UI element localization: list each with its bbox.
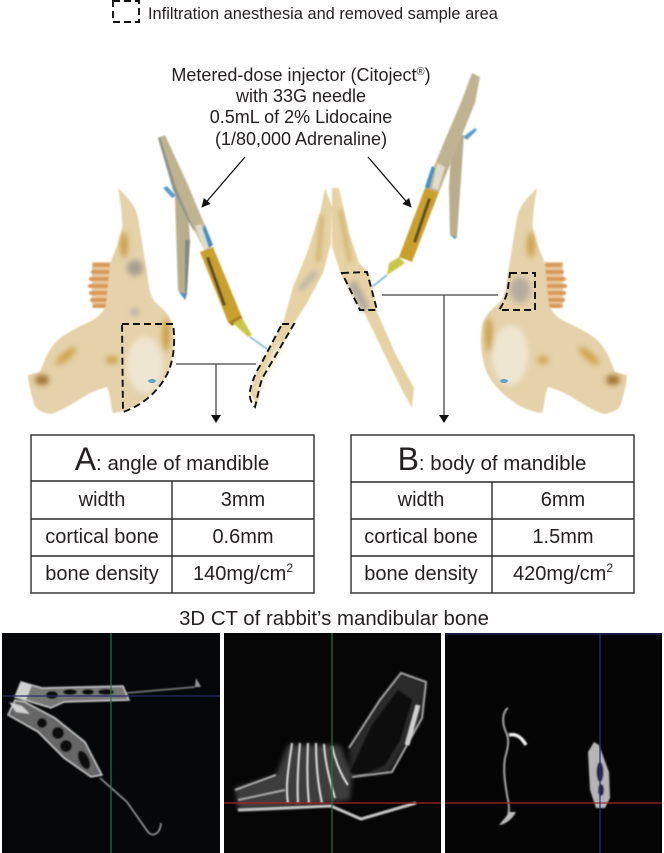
dashed sample area A, center (250, 324, 294, 407)
table A title: A: angle of mandible (75, 441, 269, 477)
left injector (158, 135, 267, 349)
injector description text (171, 65, 431, 149)
injector description text: (1/80,000 Adrenaline) (215, 129, 387, 149)
legend: dashed sample area key: Infiltration anesthesia and removed sample area (148, 5, 499, 23)
table A rows: bone density (45, 563, 159, 585)
bracket arrow: angle of mandible to table A (176, 364, 256, 423)
injector description text: Metered-dose injector (Citoject (171, 65, 416, 85)
table A rows: 0.6mm (212, 526, 274, 548)
injector description text: ) (425, 65, 431, 85)
teeth (88, 262, 114, 308)
table A rows: 140mg/cm (193, 563, 286, 585)
table B title: B: body of mandible (398, 441, 586, 477)
table A: angle of mandible (31, 435, 314, 593)
right mandible specimen (481, 188, 627, 414)
table B rows (364, 489, 613, 585)
table B: body of mandible (351, 435, 634, 593)
dashed sample area B, right (499, 273, 535, 310)
dashed sample area B, center (342, 272, 377, 310)
table A rows: cortical bone (45, 526, 159, 548)
CT panel: coronal view (445, 633, 662, 853)
table B rows: cortical bone (364, 526, 478, 548)
right injector (372, 73, 480, 287)
CT heading: 3D CT of rabbit’s mandibular bone (179, 608, 489, 630)
injector description text: with 33G needle (235, 86, 366, 106)
teeth (541, 262, 567, 308)
left mandible specimen (28, 188, 174, 414)
table A rows: 3mm (221, 489, 265, 511)
arrow: to left injector (202, 157, 245, 207)
table B rows: width (397, 489, 444, 511)
arrow: to right injector (368, 157, 411, 207)
table A rows (45, 489, 293, 585)
CT panel: sagittal view (224, 633, 441, 853)
table A rows: 2 (286, 561, 293, 575)
table B rows: 1.5mm (532, 526, 594, 548)
injector description text: 0.5mL of 2% Lidocaine (210, 107, 392, 127)
CT panel: axial view (2, 633, 220, 853)
table B rows: 2 (606, 561, 613, 575)
table B rows: 420mg/cm (513, 563, 606, 585)
center mandible specimen, lower view (250, 188, 414, 408)
table B rows: bone density (364, 563, 478, 585)
dashed sample area A (122, 324, 174, 412)
bracket arrow: body of mandible to table B (382, 295, 498, 423)
table B rows: 6mm (541, 489, 585, 511)
injector description text: ® (416, 66, 425, 78)
table A rows: width (78, 489, 125, 511)
